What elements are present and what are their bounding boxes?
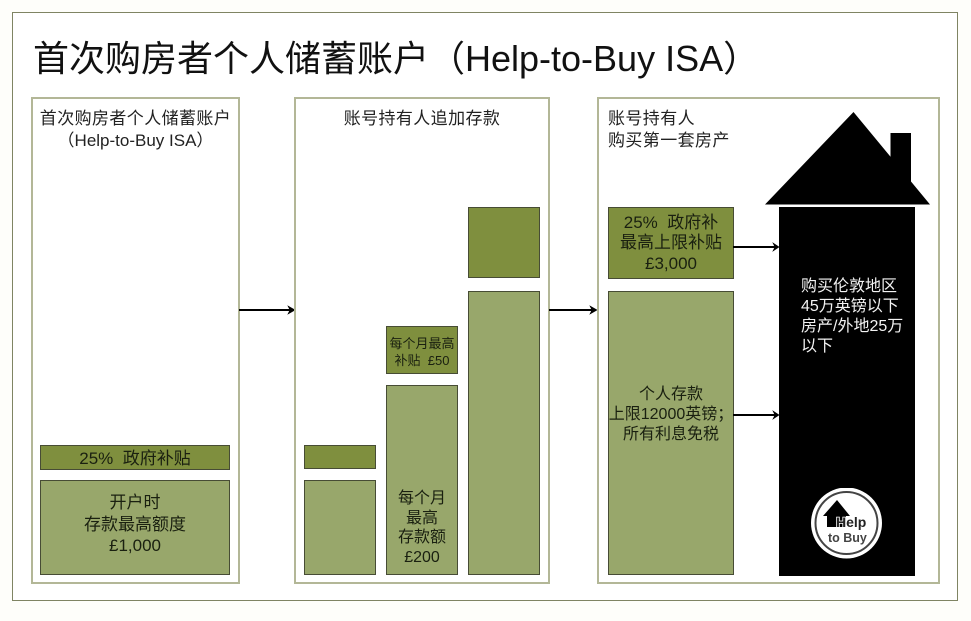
icon: Help to Buy logo: Help	[836, 514, 866, 530]
bar: 25% government bonus: 25% 政府补贴	[79, 448, 191, 468]
icon: house roof	[765, 112, 930, 204]
bar: opening deposit: 开户时 存款最高额度 £1,000	[84, 493, 186, 555]
bar: personal savings: 个人存款 上限12000英镑； 所有利息免税	[609, 386, 733, 443]
house price text: 购买伦敦地区	[801, 278, 897, 295]
panel heading: account name	[40, 109, 231, 150]
panel: buying first home	[597, 97, 940, 584]
bar: monthly deposit: 每个月 最高 存款额 £200	[398, 490, 446, 566]
bar: tall deposit	[468, 291, 540, 575]
bar: monthly deposit	[386, 385, 458, 575]
bar: government bonus cap: 25% 政府补 最高上限补贴 £3,000	[620, 213, 722, 273]
panel heading: buying first home: 购买第一套房产	[608, 131, 730, 150]
panel heading: buying first home: 账号持有人	[608, 109, 695, 128]
arrow: savings to house	[733, 410, 779, 420]
bar: 25% government bonus	[40, 445, 230, 470]
house price text	[801, 277, 903, 355]
bar: personal savings	[608, 291, 734, 575]
bar: monthly bonus	[386, 326, 458, 374]
arrow: panel 2 to panel 3	[549, 305, 597, 315]
title: 首次购房者个人储蓄账户（Help-to-Buy ISA）	[33, 38, 759, 79]
house price text: 45万英镑以下	[801, 298, 899, 315]
house price text: 以下	[801, 338, 833, 355]
house price text: 房产/外地25万	[801, 318, 903, 335]
bar: monthly bonus: 每个月最高 补贴 £50	[389, 336, 454, 368]
bar: small bonus	[304, 445, 376, 469]
panel heading: account name: 首次购房者个人储蓄账户	[40, 109, 231, 128]
bar: government bonus cap	[608, 207, 734, 279]
arrow: bonus to house	[733, 242, 779, 252]
panel heading: additional savings: 账号持有人追加存款	[344, 109, 500, 128]
panel heading: buying first home	[608, 109, 730, 150]
bar: opening deposit	[40, 480, 230, 575]
bar: small deposit	[304, 480, 376, 575]
icon: Help to Buy logo	[811, 488, 882, 558]
panel: additional savings	[294, 97, 550, 584]
panel: opening the account	[31, 97, 240, 584]
icon: Help to Buy logo: to Buy	[828, 531, 867, 545]
arrow: panel 1 to panel 2	[239, 305, 294, 315]
panel heading: account name: （Help-to-Buy ISA）	[58, 131, 213, 150]
house body with price limits	[779, 207, 915, 576]
bar: tall bonus	[468, 207, 540, 278]
